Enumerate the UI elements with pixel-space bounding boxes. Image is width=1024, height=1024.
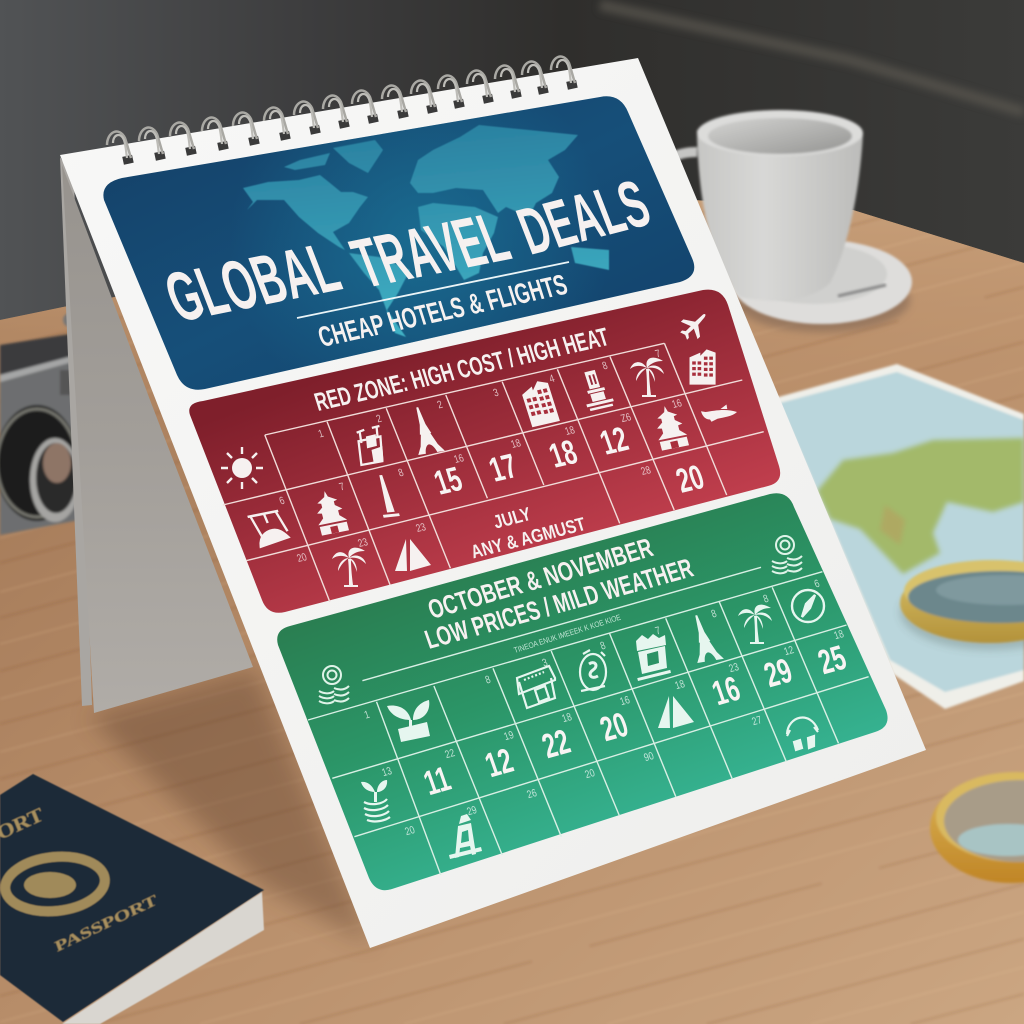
red small day numbers: 18: [563, 425, 577, 438]
red small day numbers: [278, 348, 684, 565]
merged month label: JULY: [490, 502, 534, 533]
green big day numbers: 12: [480, 742, 518, 785]
green small day numbers: 90: [642, 750, 656, 764]
green fine print: TINEOA ENUK IMEEEK K KOE KIOE: [513, 613, 622, 655]
green big day numbers: 20: [595, 706, 633, 749]
red small day numbers: 7: [654, 348, 662, 361]
world map: [243, 125, 609, 337]
red calendar grid: [223, 343, 764, 602]
green small day numbers: [363, 578, 846, 838]
red big day numbers: [429, 420, 709, 503]
red small day numbers: 28: [639, 465, 653, 478]
merged month label: ANY & AGMUST: [468, 513, 588, 563]
red small day numbers: 23: [356, 537, 370, 550]
passport emblem: [2, 852, 108, 916]
red small day numbers: 18: [509, 438, 523, 451]
passport: [0, 774, 264, 1024]
title: GLOBAL: [155, 229, 350, 337]
red small day numbers: 7: [338, 481, 346, 494]
saucer: [732, 240, 912, 332]
back page of calendar: [60, 157, 253, 713]
green big day numbers: 22: [537, 723, 575, 766]
green heading: OCTOBER & NOVEMBER: [424, 533, 657, 625]
calendar page: [60, 58, 926, 948]
green big day numbers: 11: [419, 760, 456, 803]
green big day numbers: 29: [759, 652, 797, 695]
red big day numbers: 18: [544, 433, 582, 476]
green small day numbers: 20: [403, 824, 417, 838]
camera: [0, 313, 80, 535]
panel: green zone: [277, 493, 888, 890]
green small day numbers: 8: [484, 674, 493, 687]
red small day numbers: 2: [375, 413, 383, 426]
green small day numbers: 18: [560, 711, 574, 725]
coffee cup: [672, 110, 863, 301]
green small day numbers: 7: [654, 625, 662, 638]
red small day numbers: 8: [397, 467, 405, 480]
green heading: [421, 533, 697, 655]
red small day numbers: 6: [278, 495, 286, 508]
green small day numbers: 19: [502, 729, 516, 743]
green small day numbers: 27: [750, 714, 764, 728]
red big day numbers: 20: [671, 458, 709, 501]
red big day numbers: 17: [484, 447, 522, 490]
red small day numbers: 23: [414, 522, 428, 535]
red small day numbers: Z6: [619, 411, 633, 425]
green small day numbers: 22: [443, 747, 457, 761]
title rule: [297, 262, 569, 318]
red small day numbers: 16: [670, 398, 684, 411]
green small day numbers: 3: [541, 657, 550, 670]
red big day numbers: 15: [429, 460, 467, 503]
wall light band: [600, 5, 1024, 112]
title: DEALS: [508, 166, 660, 269]
spiral binding: [107, 57, 578, 165]
passport words: [0, 804, 160, 956]
red small day numbers: 3: [492, 387, 500, 400]
green big day numbers: 25: [813, 639, 851, 682]
green small day numbers: 18: [673, 678, 687, 692]
red heading: RED ZONE: HIGH COST / HIGH HEAT: [311, 323, 612, 417]
red small day numbers: 20: [295, 551, 309, 565]
red small day numbers: 2: [436, 399, 444, 412]
green small day numbers: 1: [363, 709, 371, 722]
magnifying glass on table: [930, 772, 1024, 883]
green small day numbers: 8: [762, 593, 771, 606]
red small day numbers: 4: [548, 373, 557, 386]
green small day numbers: 16: [618, 694, 632, 708]
red small day numbers: 8: [601, 360, 609, 373]
title: TRAVEL: [342, 199, 520, 303]
map on table: [775, 364, 1024, 709]
green small day numbers: 26: [525, 787, 539, 801]
green small day numbers: 8: [710, 608, 719, 621]
green big day numbers: [419, 639, 851, 803]
green small day numbers: 13: [380, 765, 394, 779]
header panel: [103, 96, 694, 390]
subtitle: CHEAP HOTELS & FLIGHTS: [314, 269, 571, 354]
magnifying glass on map: [900, 560, 1024, 650]
green small day numbers: 23: [727, 661, 741, 675]
green heading: LOW PRICES / MILD WEATHER: [421, 553, 697, 655]
red big day numbers: 12: [595, 420, 633, 463]
panel: red zone: [189, 290, 780, 613]
red small day numbers: 16: [452, 453, 466, 466]
green small day numbers: 8: [599, 640, 608, 653]
green small day numbers: 12: [782, 644, 796, 658]
green icons: [319, 536, 824, 859]
green small day numbers: 29: [465, 804, 479, 818]
green small day numbers: 18: [832, 628, 846, 642]
green small day numbers: 6: [813, 578, 822, 591]
passport words: PASSPORT: [53, 892, 160, 956]
green big day numbers: 16: [707, 670, 745, 713]
green calendar grid: [308, 567, 869, 875]
red icons: [221, 314, 737, 587]
shadow beside calendar: [88, 668, 372, 945]
red small day numbers: 1: [317, 428, 325, 441]
title: [155, 166, 660, 337]
green small day numbers: 20: [583, 767, 597, 781]
